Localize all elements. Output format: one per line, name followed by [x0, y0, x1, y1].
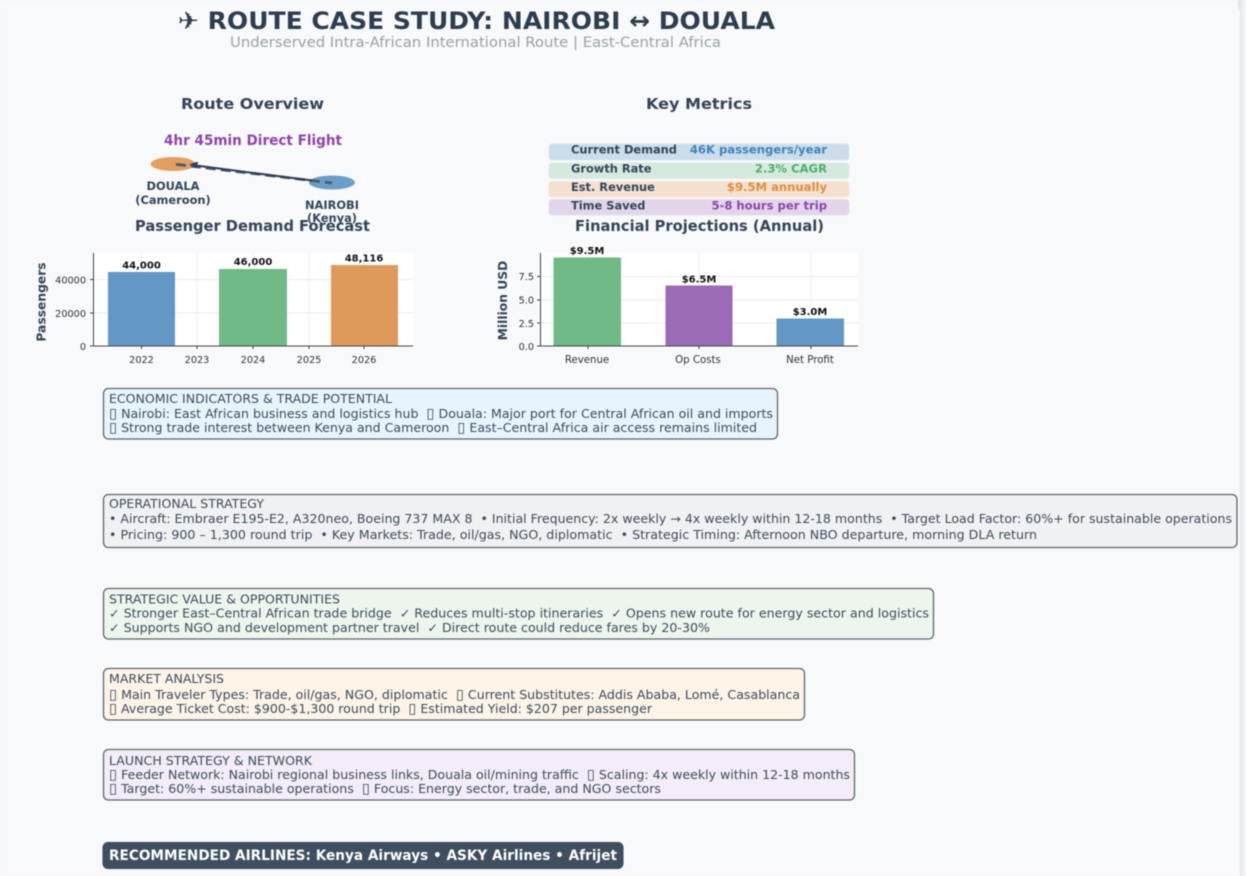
bar chart: financial projections: 5.0: [519, 296, 534, 306]
panel: economic indicators: ▯ Nairobi: East African business and logistics hub ▯ Douala: Major port for Central African oil and imports: [109, 406, 773, 422]
bar chart: financial projections: 2.5: [519, 319, 534, 330]
bar chart: passenger demand: 2025: [297, 355, 321, 366]
panel: strategic value: [104, 588, 934, 639]
bar: revenue: [554, 258, 621, 346]
panel: economic indicators: ▯ Strong trade interest between Kenya and Cameroon ▯ East–Central Africa air access remains limited: [109, 420, 757, 436]
bar chart: passenger demand: [34, 253, 413, 366]
label: Nairobi: (Kenya): [307, 211, 357, 225]
bar chart: passenger demand: Passengers: [34, 262, 48, 342]
metric: growth rate: 2.3% CAGR: [755, 162, 827, 176]
panel: launch strategy: ▯ Target: 60%+ sustainable operations ▯ Focus: Energy sector, trade, and NGO sectors: [109, 781, 661, 797]
Nairobi marker: [309, 176, 355, 190]
bar chart: financial projections: $6.5M: [682, 274, 716, 286]
subtitle: Underserved Intra-African International Route | East-Central Africa: [230, 35, 721, 51]
bar chart: passenger demand: 44,000: [122, 260, 161, 272]
label: Douala: (Cameroon): [135, 193, 211, 207]
label: Nairobi: NAIROBI: [305, 198, 359, 212]
heading: route overview: Route Overview: [181, 95, 324, 113]
panel: strategic value: ✓ Stronger East–Central African trade bridge ✓ Reduces multi-stop itineraries ✓ Opens new route for energy sector and logistics: [109, 606, 929, 620]
metric: estimated revenue: $9.5M annually: [727, 180, 827, 194]
metric: time saved: Time Saved: [571, 198, 645, 212]
bar chart: passenger demand: 20000: [55, 309, 86, 320]
bar chart: passenger demand: 0: [80, 342, 86, 353]
panel: market analysis: [104, 668, 804, 720]
panel: route overview: [135, 95, 359, 225]
bar chart: passenger demand: 2024: [241, 355, 265, 366]
bar: op costs: [666, 286, 732, 346]
panel: launch strategy: ▯ Feeder Network: Nairobi regional business links, Douala oil/mining traffic ▯ Scaling: 4x weekly within 12-18 months: [109, 767, 850, 783]
bar chart: financial projections: $9.5M: [570, 246, 604, 257]
title: ✈ ROUTE CASE STUDY: NAIROBI ↔ DOUALA: [178, 7, 775, 35]
bar chart: passenger demand: 48,116: [345, 254, 383, 264]
metric: growth rate: Growth Rate: [571, 162, 652, 176]
panel: market analysis: ▯ Average Ticket Cost: $900-$1,300 round trip ▯ Estimated Yield: $207 per passenger: [109, 701, 652, 717]
metric: current demand: Current Demand: [571, 142, 677, 156]
panel: operational strategy: • Aircraft: Embraer E195-E2, A320neo, Boeing 737 MAX 8 • Initial Frequency: 2x weekly → 4x weekly within 12-18 months • Target Load Factor: 60%+ for sustainable operations: [109, 512, 1232, 526]
metric: estimated revenue: [549, 180, 849, 197]
bar chart: financial projections: Net Profit: [786, 355, 834, 366]
panel: economic indicators: [104, 388, 778, 439]
panel: operational strategy: OPERATIONAL STRATEGY: [109, 497, 265, 511]
metric: time saved: [549, 198, 849, 215]
heading: key metrics: Key Metrics: [646, 95, 752, 113]
panel: strategic value: STRATEGIC VALUE & OPPORTUNITIES: [109, 592, 340, 606]
panel: market analysis: MARKET ANALYSIS: [109, 672, 224, 686]
callout: recommended airlines: RECOMMENDED AIRLINES: Kenya Airways • ASKY Airlines • Afrijet: [109, 848, 617, 864]
bar chart: financial projections: Revenue: [565, 355, 609, 366]
panel: operational strategy: • Pricing: 900 – 1,300 round trip • Key Markets: Trade, oil/gas, NGO, diplomatic • Strategic Timing: Afternoon NBO departure, morning DLA return: [109, 528, 1037, 542]
metric: current demand: [549, 142, 849, 160]
panel: strategic value: ✓ Supports NGO and development partner travel ✓ Direct route could reduce fares by 20-30%: [109, 621, 710, 635]
label: Douala: DOUALA: [147, 179, 200, 193]
bar chart: passenger demand: 2026: [352, 355, 376, 366]
bar chart: financial projections: [496, 246, 858, 366]
panel: key metrics: [549, 95, 849, 215]
bar chart: financial projections: $3.0M: [793, 307, 827, 318]
bar chart: financial projections: 7.5: [519, 272, 534, 283]
callout: recommended airlines: [103, 842, 623, 868]
bar: net profit: [776, 318, 844, 346]
bar: 2022: [108, 272, 175, 346]
flight time label: 4hr 45min Direct Flight: [164, 133, 342, 149]
heading: financial projections: Financial Projections (Annual): [575, 217, 824, 235]
metric: estimated revenue: Est. Revenue: [571, 180, 655, 194]
arrow: Nairobi to Douala: [176, 162, 332, 183]
Douala marker: [150, 157, 196, 171]
bar chart: passenger demand: 2023: [185, 355, 209, 366]
bar: 2026: [331, 265, 398, 346]
metric: time saved: 5-8 hours per trip: [711, 198, 827, 212]
bar: 2024: [219, 269, 287, 346]
heading: passenger demand forecast: Passenger Demand Forecast: [135, 217, 370, 235]
metric: growth rate: [549, 162, 849, 178]
bar chart: passenger demand: 46,000: [234, 257, 272, 268]
metric: current demand: 46K passengers/year: [690, 142, 827, 156]
bar chart: passenger demand: 40000: [55, 276, 86, 286]
bar chart: financial projections: Op Costs: [675, 355, 721, 366]
panel: launch strategy: [104, 750, 854, 800]
panel: operational strategy: [104, 494, 1237, 548]
bar chart: financial projections: 0.0: [519, 342, 534, 353]
panel: market analysis: ▯ Main Traveler Types: Trade, oil/gas, NGO, diplomatic ▯ Current Substitutes: Addis Ababa, Lomé, Casablanca: [109, 687, 800, 703]
panel: launch strategy: LAUNCH STRATEGY & NETWORK: [109, 754, 313, 768]
panel: economic indicators: ECONOMIC INDICATORS & TRADE POTENTIAL: [109, 392, 392, 406]
bar chart: passenger demand: 2022: [129, 355, 154, 366]
bar chart: financial projections: Million USD: [496, 261, 510, 340]
